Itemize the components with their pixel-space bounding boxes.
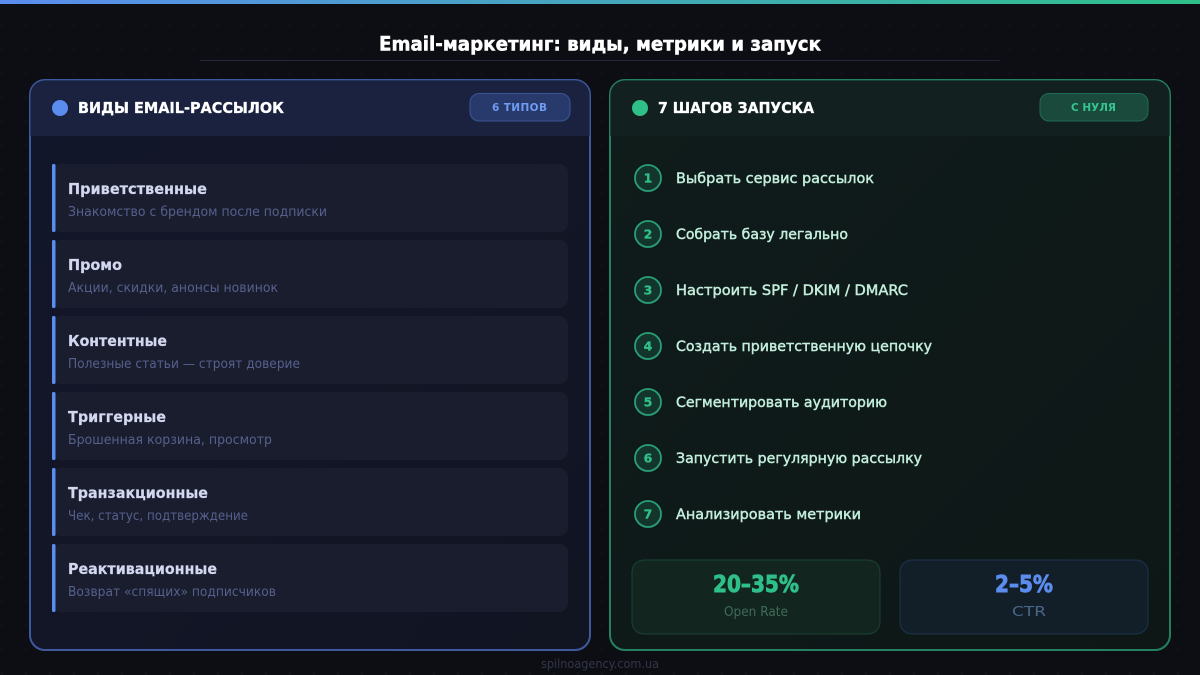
step 5 [635, 389, 887, 415]
step 6: Запустить регулярную рассылку [676, 451, 922, 467]
card: content: Полезные статьи — строят доверие [68, 357, 300, 372]
step 7: Анализировать метрики [676, 507, 861, 523]
step 4: 4 [644, 338, 653, 354]
heading: email types: ВИДЫ EMAIL-РАССЫЛОК [78, 99, 284, 117]
step 6: 6 [644, 450, 653, 466]
panel: launch steps [610, 80, 1170, 650]
card: welcome: Знакомство с брендом после подписки [68, 205, 327, 220]
badge: 6 types [470, 94, 570, 121]
badge: 6 types: 6 ТИПОВ [492, 102, 547, 114]
metric: open rate: Open Rate [724, 605, 788, 620]
panel header: launch steps [610, 80, 1170, 136]
card: content [52, 316, 568, 384]
step 6 [635, 445, 922, 471]
step 3 [635, 277, 908, 303]
metric: open rate [632, 560, 880, 634]
badge: from scratch: С НУЛЯ [1071, 102, 1116, 114]
card: trigger [52, 392, 568, 460]
card: promo: Акции, скидки, анонсы новинок [68, 281, 278, 296]
step 3: 3 [644, 282, 652, 298]
card: reactivation: Реактивационные [68, 560, 217, 578]
card: reactivation [52, 544, 568, 612]
step 1: 1 [644, 170, 652, 186]
step 2 [635, 221, 848, 247]
card: welcome: Приветственные [68, 180, 207, 198]
heading: launch steps: 7 ШАГОВ ЗАПУСКА [658, 99, 814, 117]
metric: CTR: 2–5% [995, 572, 1053, 598]
step 2: 2 [644, 226, 652, 242]
step 5: 5 [644, 394, 652, 410]
card: transactional: Транзакционные [68, 484, 208, 502]
metric: open rate: 20–35% [713, 572, 799, 598]
card: promo [52, 240, 568, 308]
metric: CTR [900, 560, 1148, 634]
card: reactivation: Возврат «спящих» подписчиков [68, 585, 276, 600]
title: Email-маркетинг: виды, метрики и запуск [379, 32, 821, 56]
step 1 [635, 165, 874, 191]
panel header: email types [30, 80, 590, 136]
card: content: Контентные [68, 332, 167, 350]
card: trigger: Брошенная корзина, просмотр [68, 433, 272, 448]
card: transactional [52, 468, 568, 536]
step 7 [635, 501, 861, 527]
top gradient bar [0, 0, 1200, 4]
step 2: Собрать базу легально [676, 227, 848, 243]
footer source: spilnoagency.com.ua [541, 657, 659, 671]
step 5: Сегментировать аудиторию [676, 395, 887, 411]
card: welcome [52, 164, 568, 232]
step 1: Выбрать сервис рассылок [676, 171, 874, 187]
step 7: 7 [644, 506, 652, 522]
metric: CTR: CTR [1012, 604, 1046, 620]
panel: email types [30, 80, 590, 650]
step 4: Создать приветственную цепочку [676, 339, 932, 355]
icon: blue dot [52, 100, 68, 116]
card: trigger: Триггерные [68, 408, 166, 426]
step 4 [635, 333, 932, 359]
badge: from scratch [1040, 94, 1148, 121]
card: promo: Промо [68, 256, 122, 274]
card: transactional: Чек, статус, подтверждение [68, 509, 248, 524]
step 3: Настроить SPF / DKIM / DMARC [676, 283, 908, 299]
icon: green dot [632, 100, 648, 116]
